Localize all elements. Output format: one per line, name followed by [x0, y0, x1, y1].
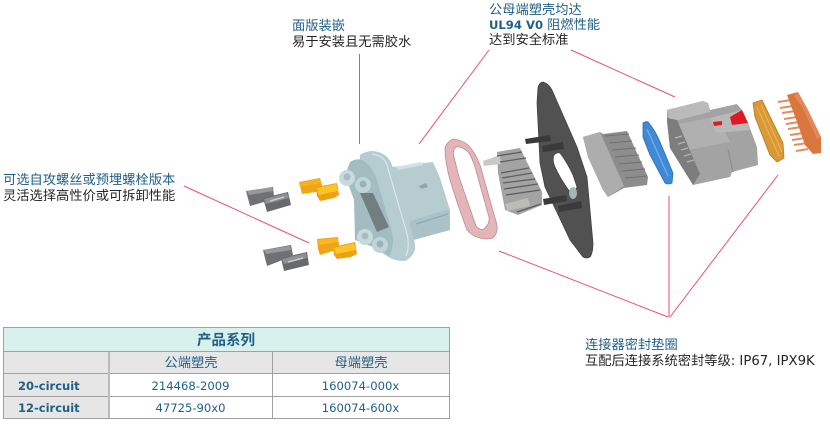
table: product series [3, 327, 450, 418]
icon: upper orange nuts [299, 178, 339, 201]
text: panel mount callout [292, 18, 411, 50]
text: flame retardant callout [489, 2, 600, 48]
icon: pink interface seal [445, 139, 497, 239]
table row: 20-circuit [18, 379, 399, 393]
icon: grey terminal retainer [583, 131, 648, 197]
icon: lower orange nuts [317, 237, 357, 259]
text: flame retardant callout: 公母端塑壳均达 [489, 2, 582, 18]
text: seal callout [585, 336, 815, 369]
icon: orange terminal cover [778, 92, 821, 154]
icon: black panel gasket with studs [525, 82, 593, 258]
table row: 12-circuit: 12-circuit [18, 401, 80, 415]
table row: 12-circuit: 160074-600x [322, 401, 399, 415]
table row: 12-circuit: 47725-90x0 [155, 401, 226, 415]
text: flame retardant callout: 达到安全标准 [489, 31, 569, 48]
bosses [339, 170, 355, 186]
callout leader lines [184, 50, 778, 317]
table column headers [164, 355, 388, 371]
icon: blue mating seal [643, 122, 673, 184]
table column headers: 公端塑壳 [164, 355, 218, 371]
table row: 20-circuit: 20-circuit [18, 379, 80, 393]
icon: panel-mount header connector [339, 151, 450, 261]
flange [358, 151, 415, 261]
text: panel mount callout: 易于安装且无需胶水 [292, 33, 411, 50]
icon: grey receptacle housing [667, 101, 758, 185]
text: seal callout: 互配后连接系统密封等级: IP67, IPX9K [585, 352, 815, 369]
text: seal callout: 连接器密封垫圈 [585, 336, 678, 353]
contact cavity [360, 193, 389, 232]
text: screw option callout [3, 172, 175, 204]
icon: terminal block [483, 148, 542, 215]
table row: 12-circuit [18, 401, 399, 415]
icon: upper screw inserts [246, 187, 291, 212]
icon: lower screw inserts [263, 245, 309, 271]
text: screw option callout: 可选自攻螺丝或预埋螺栓版本 [3, 172, 175, 188]
text: panel mount callout: 面版装嵌 [292, 18, 345, 34]
table row: 20-circuit: 160074-000x [322, 379, 399, 393]
table row: 20-circuit: 214468-2009 [152, 379, 229, 393]
table title: 产品系列 [197, 331, 255, 349]
text: flame retardant callout: UL94 V0 阻燃性能 [489, 16, 600, 33]
icon: orange wire seal [753, 100, 784, 162]
table column headers: 母端塑壳 [334, 355, 388, 371]
body rear [384, 162, 450, 242]
text: screw option callout: 灵活选择高性价或可拆卸性能 [3, 187, 175, 204]
